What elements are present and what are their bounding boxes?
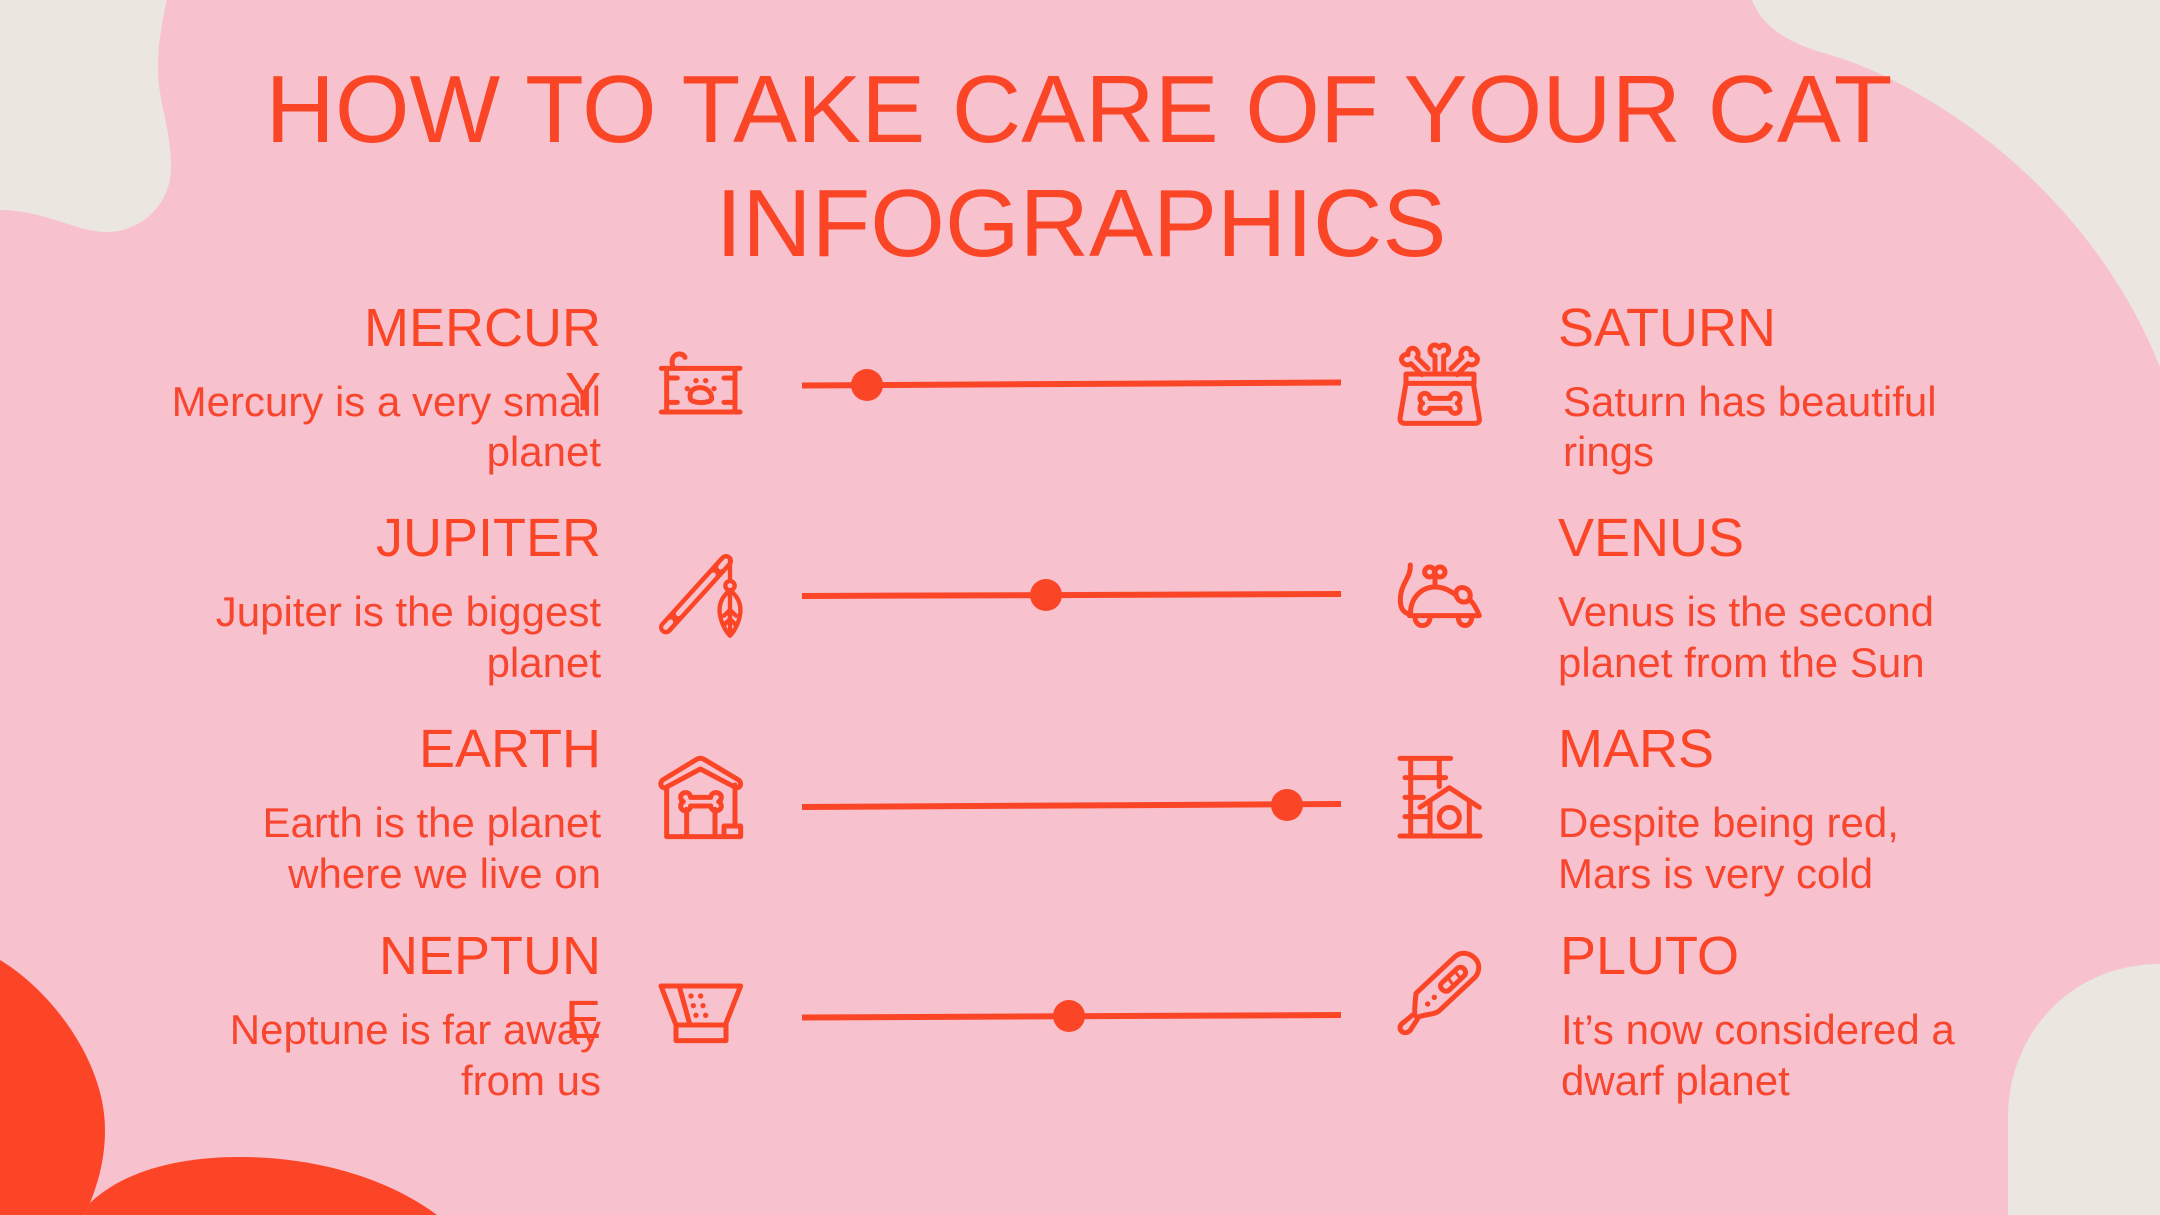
panel: venus text xyxy=(1558,508,1934,686)
icon: feather wand xyxy=(666,560,740,636)
blob: bottom right cream xyxy=(2008,964,2160,1215)
panel: pluto text: PLUTO xyxy=(1560,926,1739,986)
slider 1 xyxy=(802,369,1341,401)
title: HOW TO TAKE CARE OF YOUR CAT xyxy=(266,56,1892,163)
panel: mercury text: Y xyxy=(565,362,601,422)
title: INFOGRAPHICS xyxy=(716,170,1446,277)
panel: neptune text xyxy=(230,926,601,1104)
icon: thermometer xyxy=(1400,953,1479,1033)
blob: bottom left red petal xyxy=(0,960,105,1215)
panel: pluto text: dwarf planet xyxy=(1561,1057,1790,1104)
icon: litter tray xyxy=(661,986,741,1041)
blob: bottom red petal xyxy=(85,1157,437,1215)
panel: pluto text: It’s now considered a xyxy=(1561,1006,1955,1053)
panel: neptune text: NEPTUN xyxy=(379,926,601,986)
blob: top right cream xyxy=(1752,0,2160,367)
icon: dog house xyxy=(661,758,741,837)
panel: earth text: Earth is the planet xyxy=(262,799,601,846)
slider 4 xyxy=(802,1000,1341,1032)
panel: earth text xyxy=(262,719,601,897)
slider 2 xyxy=(802,579,1341,611)
panel: neptune text: from us xyxy=(461,1057,601,1104)
blob: top left cream xyxy=(0,0,171,232)
panel: saturn text xyxy=(1558,298,1937,475)
panel: mercury text: planet xyxy=(487,428,601,475)
panel: venus text: Venus is the second xyxy=(1558,588,1934,635)
icon: food can with paw xyxy=(661,354,740,412)
panel: neptune text: E xyxy=(565,990,601,1050)
panel: saturn text: SATURN xyxy=(1558,298,1776,358)
panel: mars text: Mars is very cold xyxy=(1558,850,1873,897)
panel: mars text xyxy=(1558,719,1899,897)
icon: ladder and cat house xyxy=(1400,758,1480,836)
panel: mercury text: Mercury is a very small xyxy=(172,378,601,425)
icon: bowl of bones xyxy=(1400,345,1479,423)
panel: mercury text xyxy=(172,298,601,475)
panel: mercury text: MERCUR xyxy=(364,298,601,358)
panel: venus text: VENUS xyxy=(1558,508,1744,568)
icon: wind-up mouse xyxy=(1400,565,1479,626)
panel: venus text: planet from the Sun xyxy=(1558,639,1925,686)
slider 3 xyxy=(802,789,1341,821)
panel: mars text: Despite being red, xyxy=(1558,799,1899,846)
panel: neptune text: Neptune is far away xyxy=(230,1006,601,1053)
panel: pluto text xyxy=(1560,926,1955,1104)
panel: jupiter text xyxy=(216,508,601,686)
panel: earth text: EARTH xyxy=(419,719,601,779)
panel: jupiter text: planet xyxy=(487,639,601,686)
panel: mars text: MARS xyxy=(1558,719,1714,779)
panel: earth text: where we live on xyxy=(287,850,601,897)
panel: jupiter text: Jupiter is the biggest xyxy=(216,588,601,635)
title xyxy=(266,56,1892,277)
panel: jupiter text: JUPITER xyxy=(376,508,601,568)
panel: saturn text: Saturn has beautiful xyxy=(1563,378,1937,425)
panel: saturn text: rings xyxy=(1563,428,1654,475)
